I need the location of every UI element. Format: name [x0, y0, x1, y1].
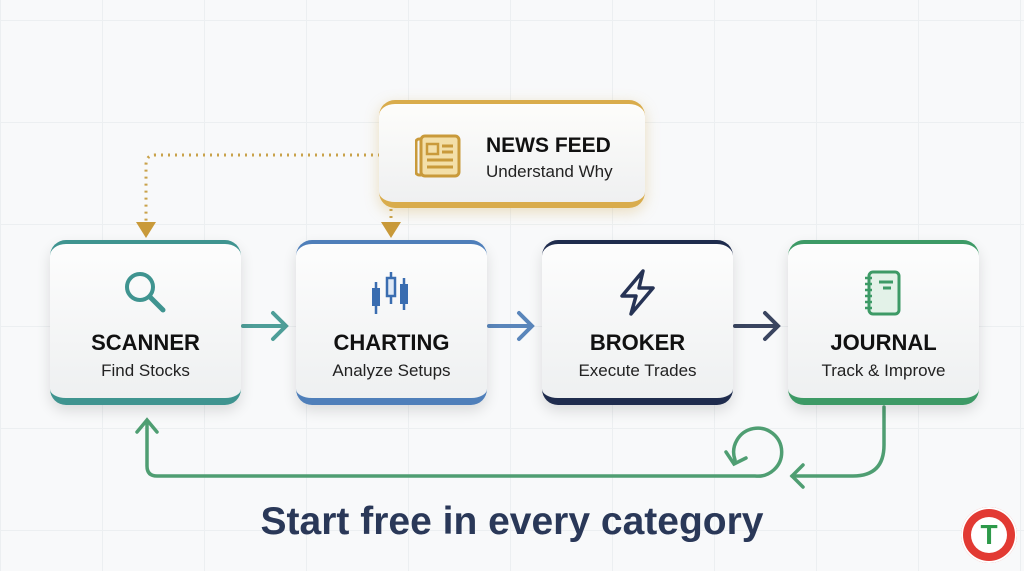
icon: logo: T: [980, 519, 998, 550]
icon: magnifier: [125, 272, 166, 312]
arrow: broker to journal: [735, 313, 778, 339]
panel: journal: JOURNAL: [830, 330, 937, 355]
heading: NEWS FEED: [486, 134, 611, 157]
panel: scanner: [50, 240, 241, 405]
panel: broker: BROKER: [590, 330, 685, 355]
icon: logo: [961, 507, 1017, 563]
icon: notebook: [865, 270, 900, 316]
arrow: news to charting: [381, 209, 401, 238]
panel: charting: [296, 240, 487, 405]
panel: charting: CHARTING: [333, 330, 450, 355]
panel: scanner: SCANNER: [91, 330, 200, 355]
panel: broker: [542, 240, 733, 405]
arrow: feedback loop: [137, 407, 884, 487]
arrow: news to scanner: [136, 155, 380, 238]
subtext: Understand Why: [486, 162, 613, 181]
panel: journal: Track & Improve: [821, 361, 946, 380]
arrow: scanner to charting: [243, 313, 286, 339]
icon: candlesticks: [372, 272, 408, 314]
panel: scanner: Find Stocks: [101, 361, 190, 380]
panel: news feed: [379, 100, 645, 208]
title: Start free in every category: [261, 500, 763, 543]
panel: broker: Execute Trades: [578, 361, 697, 380]
icon: newspaper: [415, 134, 460, 178]
icon: lightning: [620, 269, 655, 316]
arrow: charting to broker: [489, 313, 532, 339]
panel: charting: Analyze Setups: [332, 361, 451, 380]
panel: journal: [788, 240, 979, 405]
